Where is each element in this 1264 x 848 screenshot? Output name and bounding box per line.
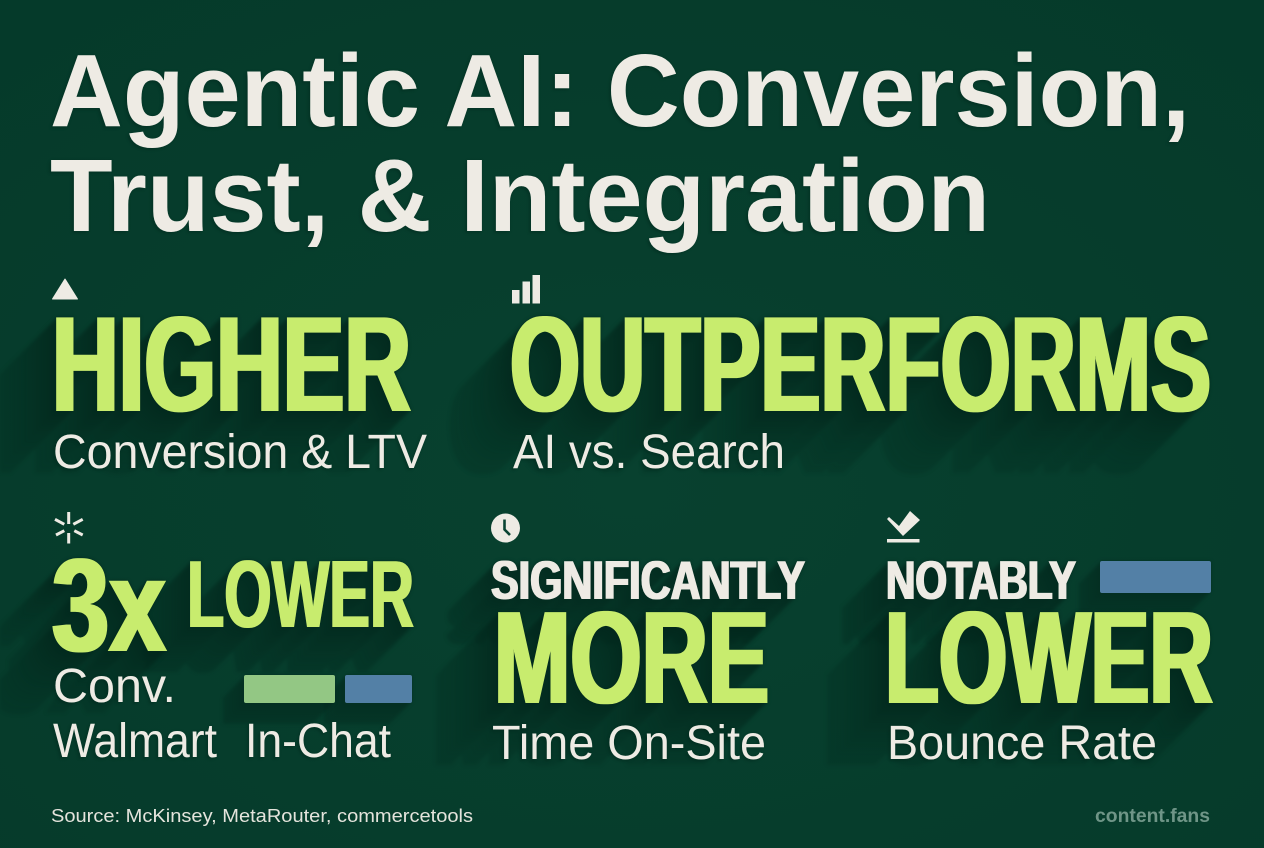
bar: In-Chat	[345, 675, 412, 703]
icon: up triangle	[52, 279, 78, 299]
label: Conversion & LTV: Conversion & LTV	[53, 426, 427, 479]
icon: clock	[491, 514, 520, 542]
panel: outperforms AI vs. search	[510, 275, 1211, 479]
label: Conv.: Conv.	[53, 660, 176, 713]
panel: significantly more time on-site	[491, 514, 805, 770]
icon: check mark	[887, 511, 920, 542]
stat: SIGNIFICANTLY: SIGNIFICANTLY	[491, 549, 805, 611]
label: AI vs. Search: AI vs. Search	[513, 426, 785, 479]
title	[50, 33, 1190, 253]
icon: spark	[55, 512, 83, 544]
stat: MORE: MORE	[494, 584, 769, 731]
panel: 3x lower conversion, Walmart vs in-chat	[52, 512, 414, 768]
brand: content.fans: content.fans	[1095, 805, 1210, 827]
source note: Source: McKinsey, MetaRouter, commercetools	[51, 805, 473, 826]
bar: blue	[1100, 561, 1211, 593]
label: Time On-Site: Time On-Site	[492, 717, 766, 770]
stat: NOTABLY: NOTABLY	[886, 549, 1076, 611]
label: In-Chat: In-Chat	[245, 715, 391, 768]
panel: notably lower bounce rate	[885, 511, 1213, 770]
stat: HIGHER: HIGHER	[52, 288, 411, 440]
icon: bar chart	[512, 275, 540, 304]
bar: Walmart	[244, 675, 335, 703]
title: Trust, & Integration	[50, 138, 990, 253]
stat: 3x: 3x	[52, 532, 166, 680]
label: Walmart: Walmart	[53, 715, 217, 768]
stat: LOWER: LOWER	[187, 541, 414, 648]
title: Agentic AI: Conversion,	[50, 33, 1190, 148]
label: Bounce Rate: Bounce Rate	[887, 717, 1157, 770]
panel: higher conversion and LTV	[52, 279, 427, 479]
